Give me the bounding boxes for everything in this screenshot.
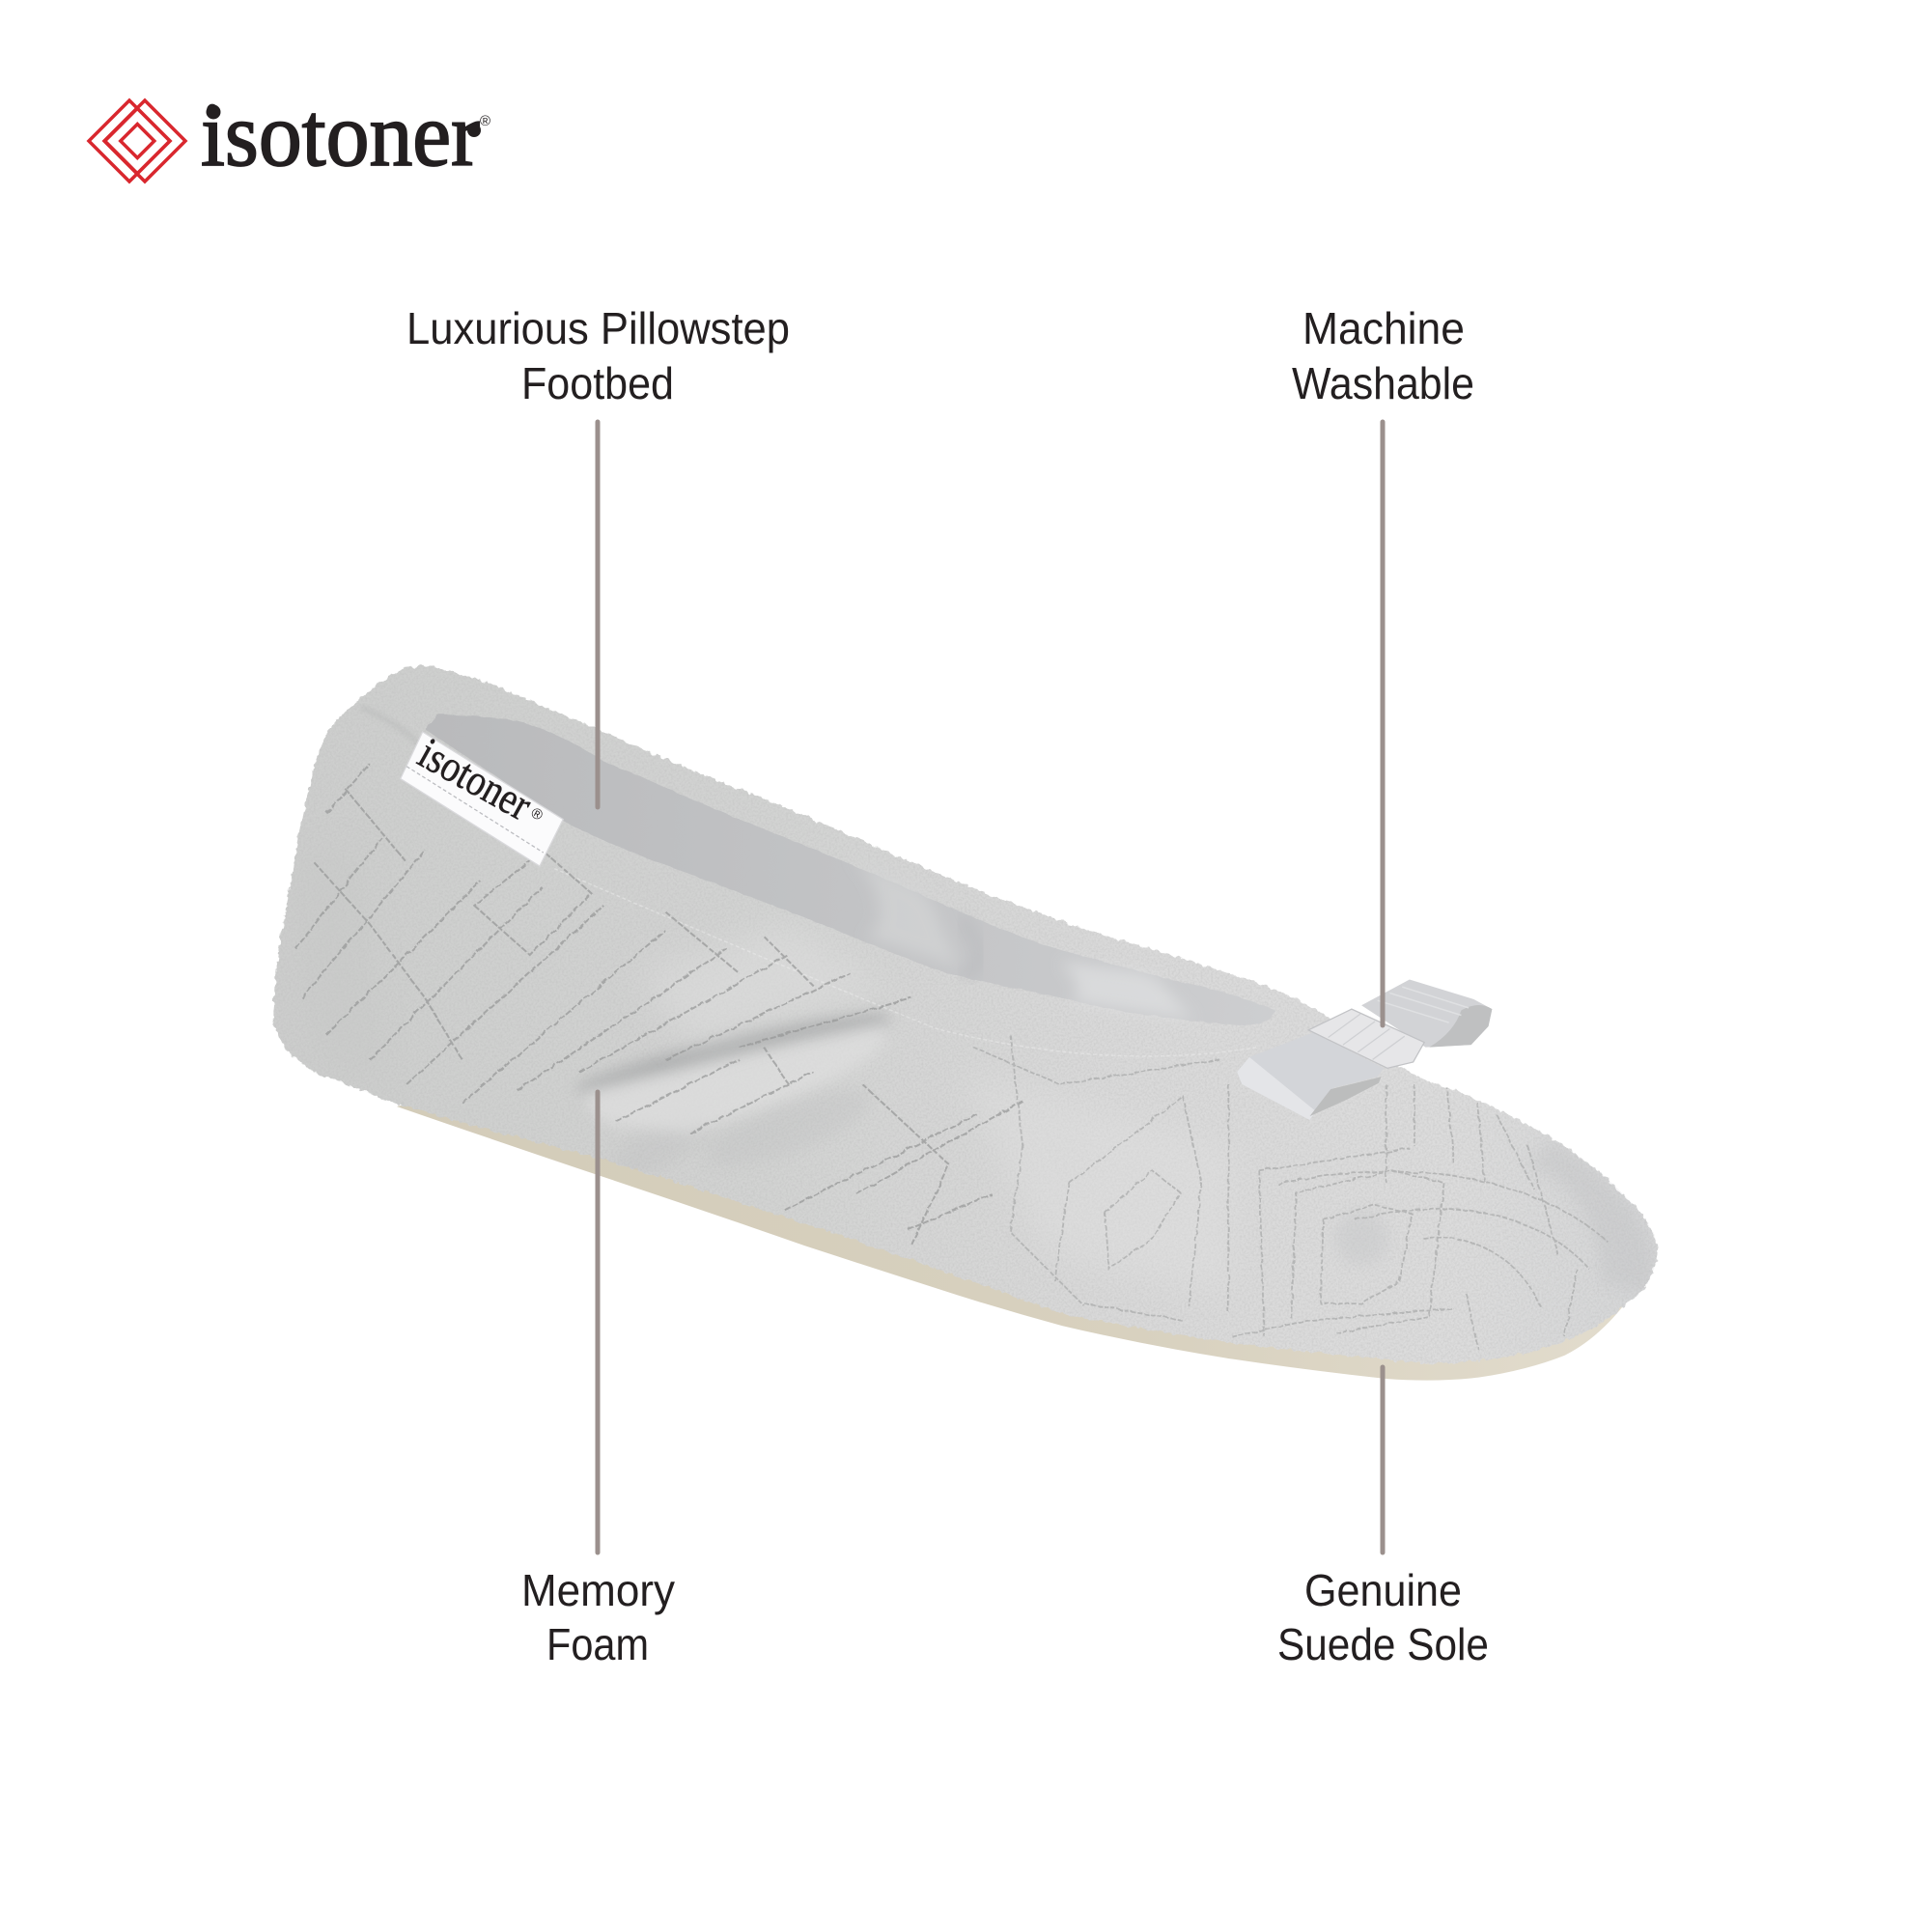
bow knot <box>1308 1009 1424 1068</box>
leader line: pillowstep footbed <box>595 422 601 807</box>
rim seam <box>554 869 1257 1056</box>
label: machine washable: Washable <box>1292 358 1474 408</box>
logo wordmark: isotoner <box>201 85 480 185</box>
leader line: genuine suede sole <box>1381 1367 1385 1553</box>
label: genuine suede sole: Genuine <box>1304 1565 1462 1615</box>
shading and folds <box>295 707 1653 1294</box>
sole <box>397 1084 1633 1381</box>
bow left loop <box>1237 1032 1384 1120</box>
label: genuine suede sole: Suede Sole <box>1277 1619 1489 1669</box>
lining highlights <box>851 856 1195 1021</box>
leader line: machine washable <box>1381 422 1385 1025</box>
label: memory foam: Foam <box>546 1619 649 1669</box>
logo: isotoner <box>89 85 490 185</box>
woven label: isotoner <box>410 728 540 829</box>
slipper photo illustration <box>273 666 1658 1381</box>
label: luxurious pillowstep footbed <box>406 303 790 408</box>
label: genuine suede sole <box>1277 1565 1489 1669</box>
label: machine washable: Machine <box>1302 303 1465 353</box>
woven label: ® <box>528 804 546 825</box>
leader line: memory foam <box>595 1092 601 1553</box>
label: memory foam <box>521 1565 675 1669</box>
collar seam <box>364 709 416 742</box>
bow <box>1237 979 1492 1120</box>
label: memory foam: Memory <box>521 1565 675 1615</box>
label: luxurious pillowstep footbed: Footbed <box>521 358 674 408</box>
inner lining <box>425 714 1275 1025</box>
quilted diamond pattern <box>295 764 1608 1349</box>
label: machine washable <box>1292 303 1474 408</box>
label: luxurious pillowstep footbed: Luxurious Pillowstep <box>406 303 790 353</box>
slipper upper <box>273 666 1658 1363</box>
logo wordmark: ® <box>480 113 490 129</box>
icon: red nested diamonds <box>89 100 185 182</box>
bow right loop <box>1361 979 1492 1048</box>
